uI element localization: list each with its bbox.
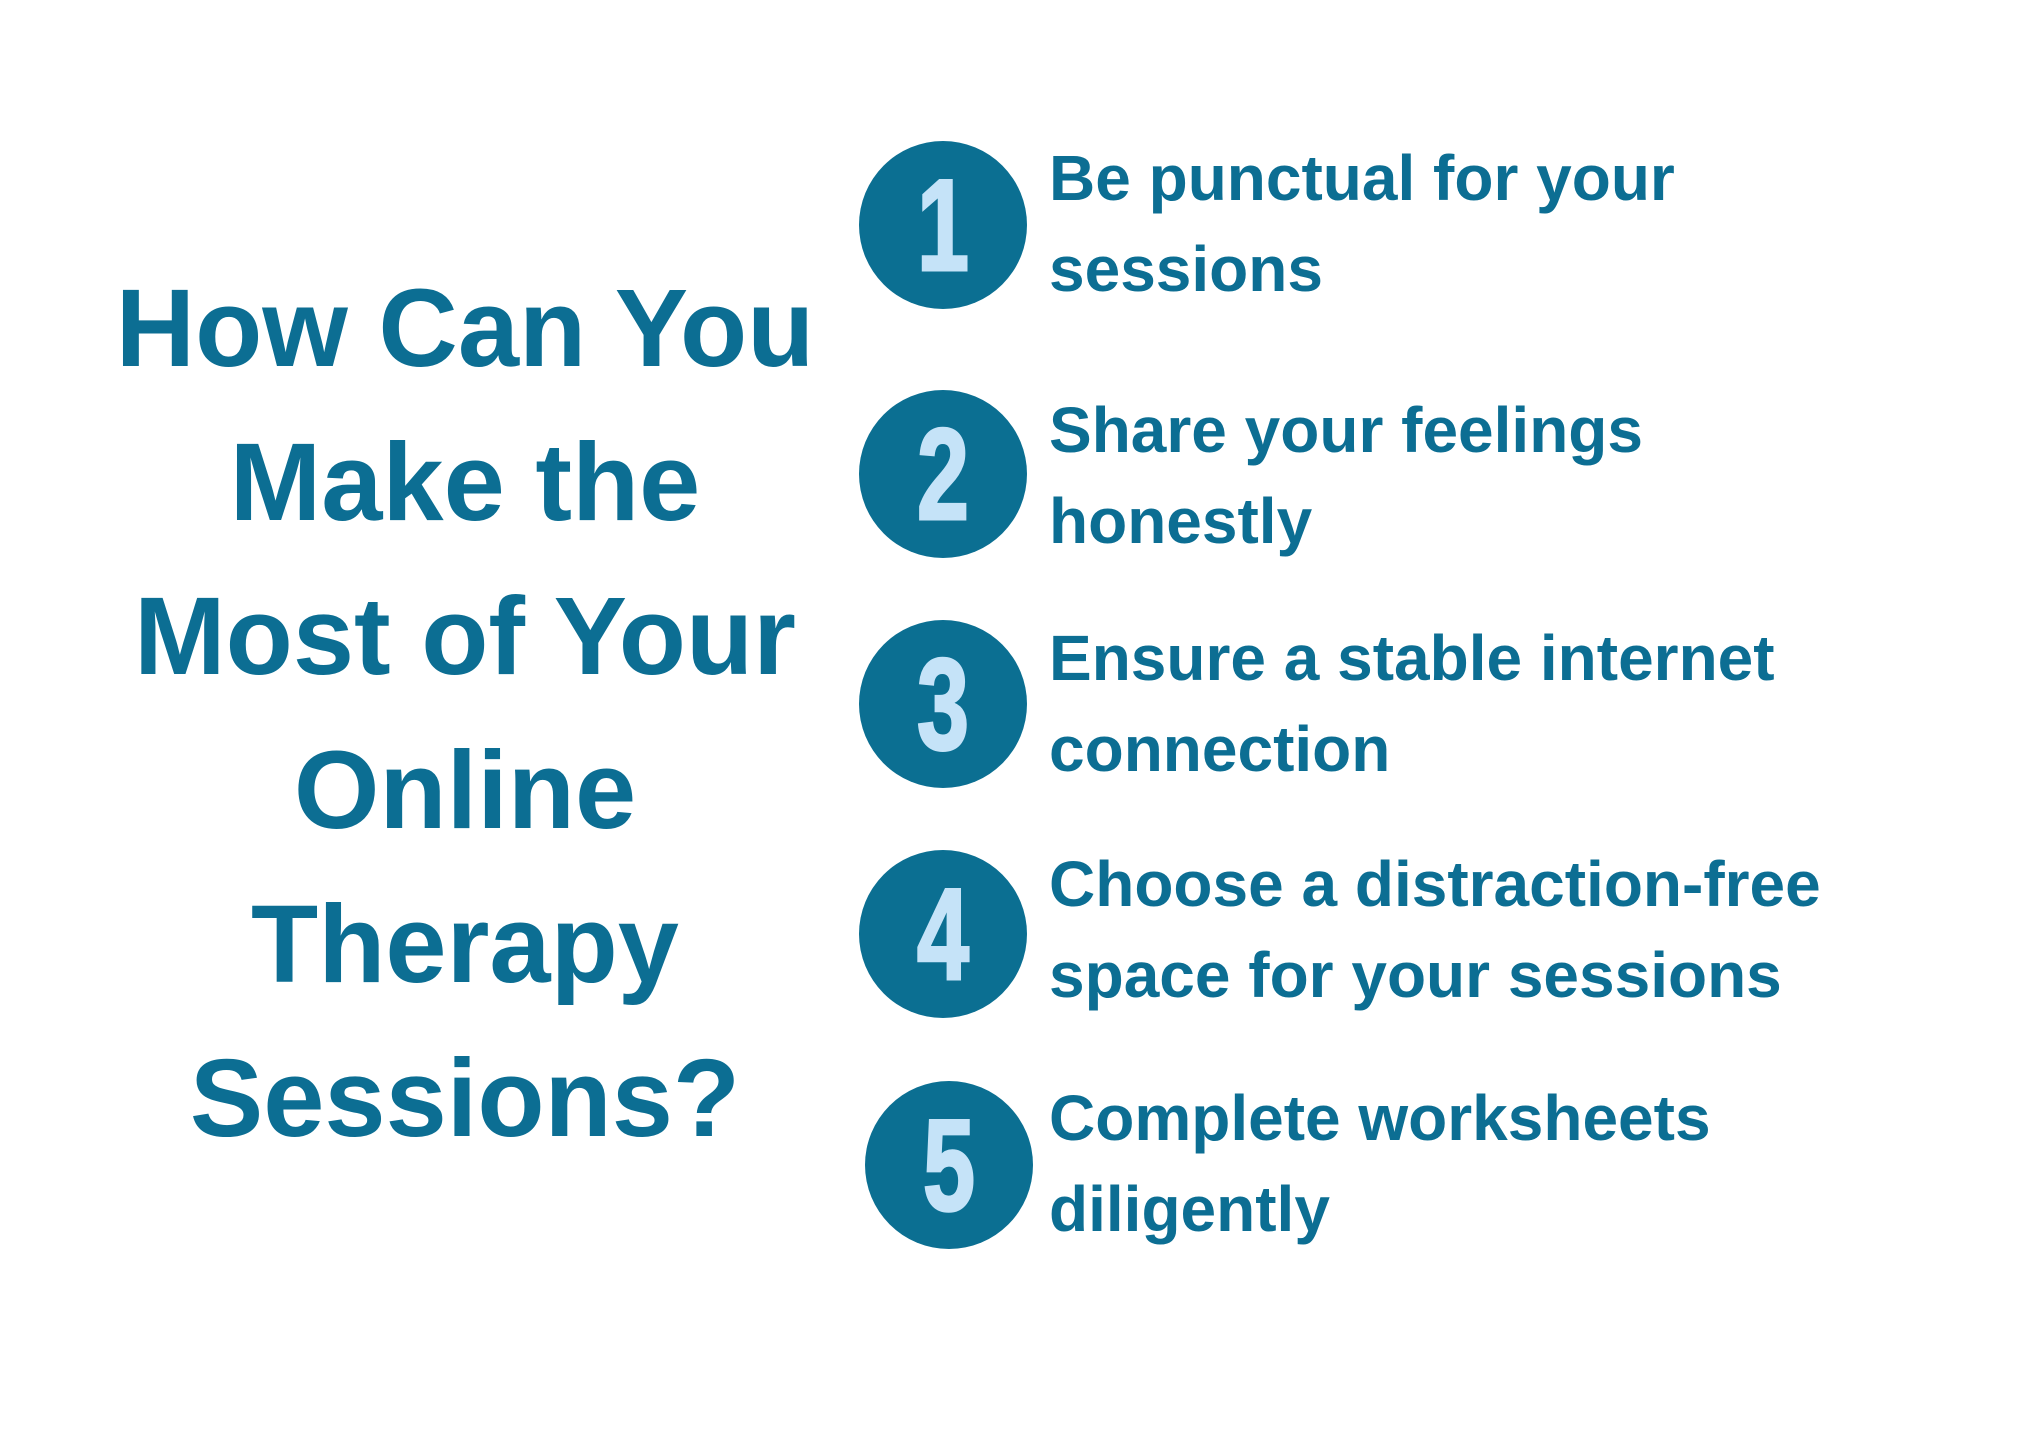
item 4 text: space for your sessions	[1049, 939, 1782, 1011]
item 3 text	[1049, 622, 1775, 785]
item 4 text: Choose a distraction-free	[1049, 848, 1821, 920]
icon: number 5	[865, 1081, 1033, 1249]
icon: number 1	[859, 141, 1027, 309]
item 1 text	[1049, 142, 1675, 305]
icon: number 1: 1	[917, 152, 969, 298]
title: Therapy	[251, 883, 679, 1006]
icon: number 2: 2	[917, 401, 969, 547]
item 1 text: Be punctual for your	[1049, 142, 1675, 214]
title: How Can You	[116, 267, 814, 390]
icon: number 4	[859, 850, 1027, 1018]
icon: number 5: 5	[923, 1092, 975, 1238]
icon: number 2	[859, 390, 1027, 558]
item 5 text: diligently	[1049, 1173, 1330, 1245]
item 2 text	[1049, 394, 1643, 557]
item 4 text	[1049, 848, 1821, 1011]
title	[116, 267, 814, 1160]
item 1 text: sessions	[1049, 233, 1323, 305]
title: Most of Your	[134, 575, 796, 698]
icon: number 3	[859, 620, 1027, 788]
icon: number 4: 4	[917, 861, 969, 1007]
item 3 text: connection	[1049, 713, 1390, 785]
title: Make the	[230, 421, 700, 544]
item 3 text: Ensure a stable internet	[1049, 622, 1775, 694]
icon: number 3: 3	[917, 631, 969, 777]
item 2 text: Share your feelings	[1049, 394, 1643, 466]
title: Online	[294, 729, 636, 852]
title: Sessions?	[190, 1037, 740, 1160]
item 5 text: Complete worksheets	[1049, 1082, 1711, 1154]
item 2 text: honestly	[1049, 485, 1312, 557]
item 5 text	[1049, 1082, 1711, 1245]
